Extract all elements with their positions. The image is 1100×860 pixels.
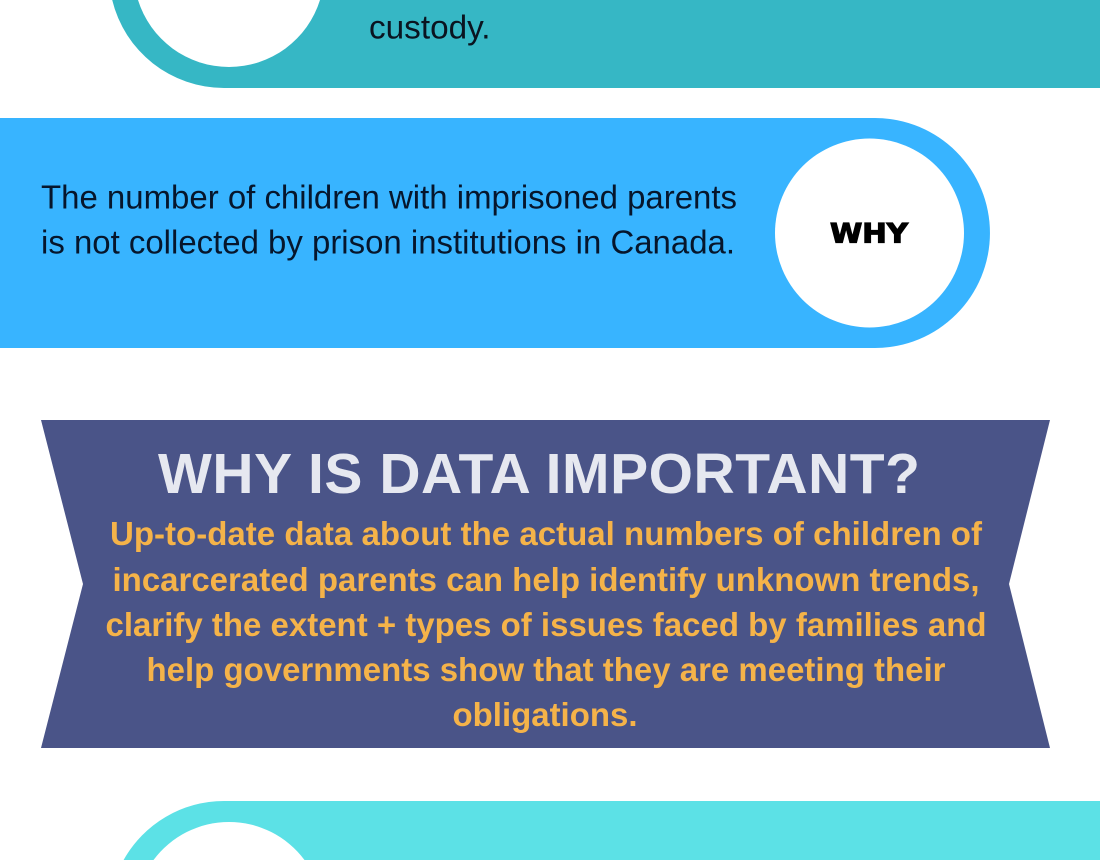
icon: white circle with WHY label	[775, 138, 964, 328]
text block: why explanation: is not collected by prison institutions in Canada.	[41, 224, 735, 262]
panel: bottom cyan	[124, 801, 1100, 860]
text block: importance of data	[106, 516, 986, 734]
text block: why explanation	[41, 180, 737, 262]
panel: top teal custody: custody.	[369, 10, 491, 46]
icon: white circle with WHY label: WHY	[830, 218, 908, 250]
heading: WHY IS DATA IMPORTANT?	[158, 442, 920, 506]
text block: importance of data: clarify the extent + types of issues faced by families and	[106, 607, 986, 644]
panel: why is data important banner	[41, 420, 1050, 748]
panel: top teal custody	[112, 0, 1100, 88]
text block: importance of data: incarcerated parents can help identify unknown trends,	[112, 562, 980, 599]
text block: why explanation: The number of children with imprisoned parents	[41, 180, 737, 216]
panel: why blue	[0, 118, 990, 348]
text block: importance of data: Up-to-date data about the actual numbers of children of	[110, 516, 983, 553]
text block: importance of data: help governments show that they are meeting their	[146, 652, 946, 689]
text block: importance of data: obligations.	[452, 697, 638, 734]
